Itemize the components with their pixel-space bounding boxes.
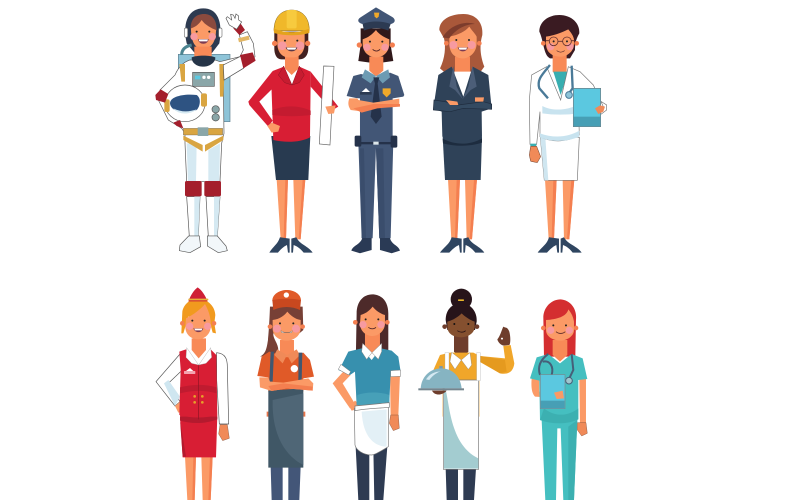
badge <box>291 365 298 372</box>
figure: astronaut <box>155 8 256 253</box>
round dials <box>212 106 219 113</box>
knee pads <box>185 181 202 196</box>
shoes <box>440 237 462 253</box>
clipboard <box>540 375 565 409</box>
hair <box>543 299 576 357</box>
trousers <box>271 467 301 500</box>
teal undershirt <box>553 72 568 95</box>
hair bun <box>451 289 472 310</box>
hair and face <box>191 14 217 33</box>
neck <box>454 335 468 360</box>
figure: server with cloche <box>418 289 514 500</box>
crossed arms <box>259 377 313 391</box>
tie <box>371 77 382 124</box>
arms <box>531 378 586 423</box>
collar <box>278 66 304 85</box>
harness straps <box>179 64 185 82</box>
face <box>546 309 574 341</box>
police cap <box>358 7 395 24</box>
shirt <box>257 352 314 392</box>
suit body <box>158 57 243 182</box>
figure: engineer <box>248 10 338 253</box>
neck <box>285 55 299 75</box>
face <box>360 307 385 336</box>
collar <box>450 352 472 369</box>
hand on hip <box>267 123 280 133</box>
lapels <box>449 66 477 99</box>
vest <box>179 349 217 417</box>
boots <box>179 236 201 253</box>
scrub top <box>530 354 587 423</box>
neck <box>369 57 383 77</box>
apron <box>443 380 479 469</box>
jacket <box>433 67 492 140</box>
face <box>273 312 301 341</box>
face <box>449 27 477 58</box>
legs <box>448 179 477 239</box>
ears <box>541 326 546 330</box>
hand under tray <box>432 391 447 395</box>
hair <box>274 32 308 59</box>
left cuff <box>155 89 168 103</box>
neck <box>192 338 206 358</box>
ears <box>444 41 449 46</box>
neck <box>365 333 380 353</box>
hair <box>356 294 388 350</box>
neck <box>455 57 470 80</box>
crossed arms <box>348 98 399 112</box>
crossed arms <box>433 100 492 112</box>
shoes <box>351 238 372 253</box>
shirt <box>347 73 404 143</box>
hair <box>358 28 393 63</box>
suspenders <box>269 352 302 382</box>
left sleeve <box>156 354 182 406</box>
neck <box>280 340 294 358</box>
right sleeve <box>217 353 229 424</box>
cloche <box>439 366 443 370</box>
legs <box>277 179 305 239</box>
helmet held <box>165 85 205 122</box>
hands <box>446 97 484 105</box>
hand on clipboard <box>595 105 605 114</box>
shirt <box>338 348 401 406</box>
badge and pocket <box>383 88 391 97</box>
helmet hood and headset <box>185 8 220 53</box>
apron <box>354 403 388 455</box>
legs <box>185 457 213 500</box>
collar <box>186 348 212 365</box>
hard hat <box>274 10 309 31</box>
trousers <box>356 447 387 500</box>
ears <box>357 42 362 48</box>
mustard shirt and raised arm <box>433 345 514 417</box>
belt and pouches <box>360 142 393 144</box>
blouse <box>453 72 472 97</box>
trousers <box>446 468 476 500</box>
ears <box>272 41 277 46</box>
skirt <box>180 415 217 457</box>
skirt <box>540 137 579 180</box>
clipboard <box>573 88 601 127</box>
glove <box>233 23 245 35</box>
gold buttons <box>193 395 204 404</box>
backpack <box>178 54 230 122</box>
skirt <box>443 137 482 180</box>
cuff and hand <box>530 144 536 146</box>
helmet side ring <box>201 93 207 107</box>
trousers <box>542 420 577 500</box>
raised arm <box>223 32 255 80</box>
shoes <box>538 237 559 253</box>
face <box>277 33 305 57</box>
chest panel <box>193 72 214 86</box>
hand on roll <box>325 105 336 114</box>
hand <box>554 391 564 399</box>
collar <box>192 56 215 67</box>
ears <box>268 324 272 329</box>
ears <box>180 321 185 326</box>
hair <box>181 298 216 333</box>
neck <box>553 55 567 78</box>
face <box>546 29 574 57</box>
glasses <box>546 37 575 46</box>
ears <box>353 320 358 325</box>
hands behind hips <box>267 412 305 417</box>
ears <box>442 324 447 329</box>
shirt collar <box>362 69 390 83</box>
figure: police officer <box>347 7 404 253</box>
legs <box>545 179 574 239</box>
figure: nurse <box>530 299 587 500</box>
collar <box>274 349 300 363</box>
face <box>185 304 211 339</box>
skirt <box>271 136 310 180</box>
face <box>447 313 475 337</box>
OK hand <box>497 327 510 346</box>
collar <box>362 343 382 359</box>
hair sweep <box>443 23 475 38</box>
cap <box>272 290 301 301</box>
pale suit shading <box>187 143 220 182</box>
name tag <box>184 371 195 374</box>
ponytail and hair <box>260 307 303 357</box>
hair <box>439 14 484 73</box>
neck <box>553 340 567 362</box>
hat <box>188 287 208 301</box>
white coat <box>529 67 607 144</box>
figure: cap waitress <box>257 290 314 500</box>
cuffs <box>338 364 401 377</box>
figure: flight attendant <box>156 287 229 500</box>
stethoscope <box>539 354 573 378</box>
ears <box>541 41 546 46</box>
arms <box>333 372 400 417</box>
figure: housekeeper <box>333 294 401 500</box>
hands <box>175 402 187 413</box>
apron <box>268 388 303 468</box>
shoes <box>269 237 290 253</box>
hair <box>539 15 579 58</box>
figure: businesswoman <box>433 14 492 253</box>
trousers <box>358 142 393 238</box>
belt <box>183 128 223 135</box>
blueprint roll <box>319 66 334 145</box>
figure: doctor <box>529 15 607 253</box>
blouse <box>271 67 311 142</box>
stethoscope <box>539 65 573 98</box>
face <box>363 30 389 57</box>
